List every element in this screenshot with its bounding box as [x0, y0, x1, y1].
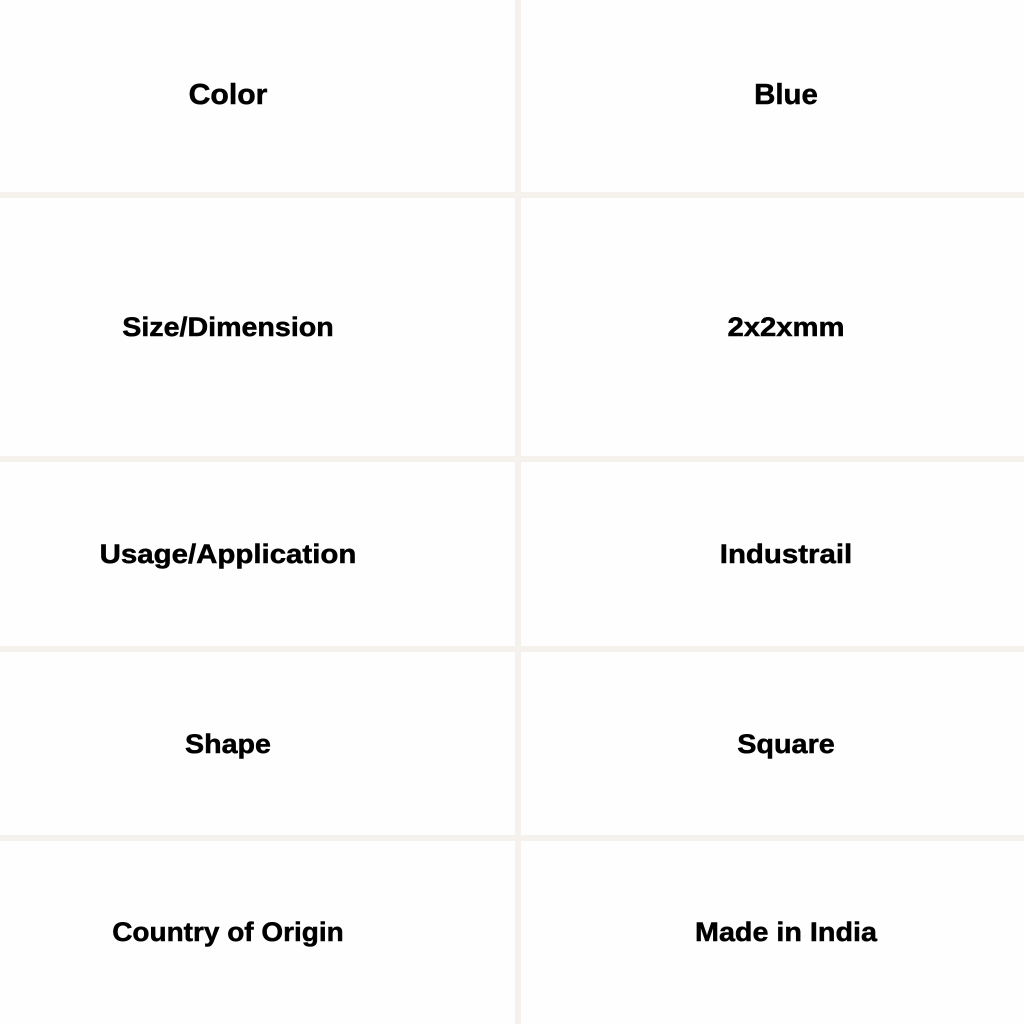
row label: Usage/Application: Usage/Application: [100, 539, 356, 569]
row value: Blue: Blue: [754, 79, 817, 111]
row label: Size/Dimension: Size/Dimension: [122, 312, 334, 342]
row value: Made in India: Made in India: [695, 917, 876, 947]
row label: Shape: Shape: [185, 729, 271, 759]
row label: Color: Color: [189, 79, 267, 111]
row label: Country of Origin: Country of Origin: [112, 917, 344, 947]
row value: Industrail: Industrail: [719, 539, 852, 569]
row value: 2x2xmm: 2x2xmm: [727, 312, 844, 342]
row value: Square: Square: [737, 729, 834, 759]
